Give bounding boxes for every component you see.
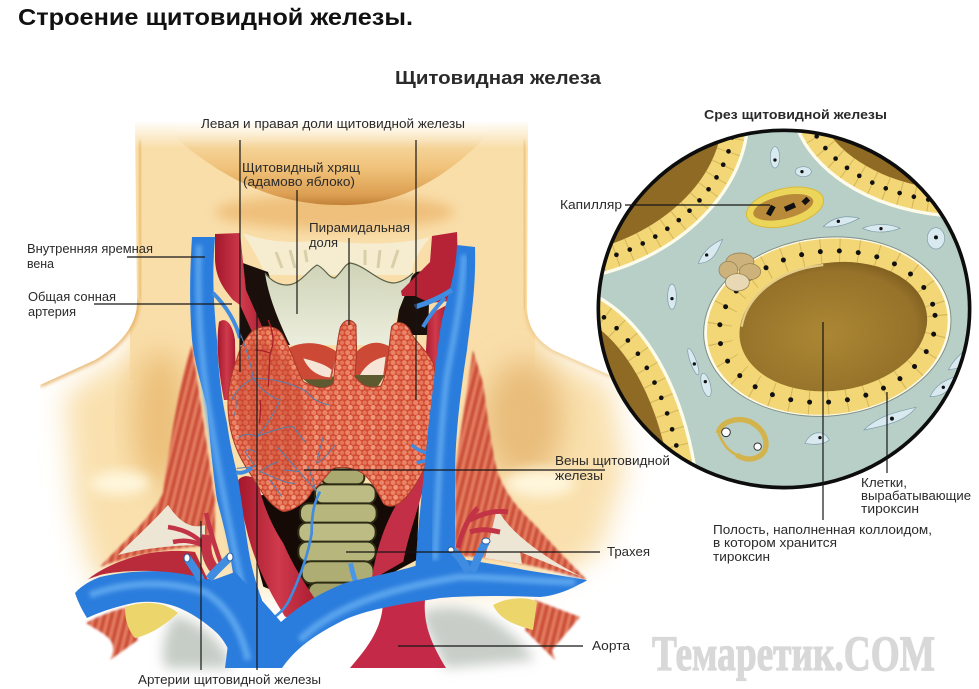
carotid artery: left middle: [218, 320, 236, 400]
label: internal jugular vein: [27, 241, 153, 271]
muscle behind right clavicle: [525, 600, 580, 660]
label: thyroxine-producing cells: вырабатывающие: [861, 488, 971, 503]
carotid artery: right middle: [424, 305, 447, 400]
follicle: central: [703, 236, 952, 417]
follicle: lower left: [600, 296, 696, 464]
thyroid vein on trachea: [275, 492, 320, 617]
label: colloid cavity: тироксин: [713, 549, 770, 564]
jugular branch: left to thyroid: [236, 468, 252, 473]
larynx cartilage: [265, 250, 413, 345]
label: aorta: Аорта: [592, 638, 631, 653]
isthmus shadow: [300, 375, 385, 395]
label: colloid cavity: Полость, наполненная коллоидом,: [713, 522, 932, 537]
label: common carotid artery: Общая сонная: [28, 289, 116, 304]
internal jugular vein: right: [415, 245, 475, 575]
label: thyroxine-producing cells: [861, 475, 971, 516]
fade at top of neck: [125, 120, 540, 148]
label: thyroxine-producing cells: тироксин: [861, 501, 919, 516]
larynx fringe: [243, 233, 430, 275]
label: internal jugular vein: Внутренняя яремная: [27, 241, 153, 256]
label: thyroid cartilage: Щитовидный хрящ: [242, 160, 360, 175]
carotid artery: left lower: [238, 476, 318, 620]
dark cavity left of larynx: [240, 262, 292, 345]
panel: neck anatomy illustration: [40, 122, 640, 674]
label: pyramidal lobe: Пирамидальная: [309, 220, 410, 235]
label: capillary: Капилляр: [560, 197, 622, 212]
heading: illustration title: Щитовидная железа: [395, 67, 602, 88]
trachea rear shadow and rings: [228, 320, 437, 620]
label: colloid cavity: [713, 522, 932, 564]
aorta: [350, 600, 446, 668]
small cross-cut vessel: [718, 420, 766, 459]
skin: neck and shoulders: [40, 120, 625, 600]
label: thyroid cartilage: [242, 160, 360, 189]
lens background: [599, 131, 969, 487]
label: trachea: Трахея: [607, 544, 650, 559]
internal jugular vein: left: [190, 237, 262, 668]
carotid artery: right lower: [372, 463, 429, 580]
jugular branches: upper: [213, 290, 452, 338]
skin: chin shadow: [178, 125, 487, 205]
vein stub on trachea: [351, 563, 359, 590]
side muscle: right: [455, 350, 587, 580]
label: thyroid veins: железы: [555, 468, 603, 483]
panel: thyroid cross-section lens: [596, 128, 972, 490]
isthmus muscles: [288, 343, 391, 379]
clavicle: right: [493, 598, 537, 630]
lens outline: [598, 130, 970, 488]
skin: under-chin tone: [215, 194, 455, 230]
label: common carotid artery: [28, 289, 116, 319]
carotid artery: right upper: [401, 232, 459, 303]
label: thyroid veins: [555, 453, 670, 483]
subclavian and brachiocephalic veins: [75, 558, 587, 668]
capillary: [746, 186, 824, 228]
thyroid veins: thin branching vessels: [232, 320, 335, 497]
label: thyroid cartilage: (адамово яблоко): [243, 174, 355, 189]
heading: cross-section title: Срез щитовидной железы: [704, 107, 887, 122]
vessels near left clavicle: [87, 513, 222, 580]
vessels near right clavicle: [458, 508, 508, 548]
fibrocyte nuclei: [670, 158, 945, 439]
heading: page title: Строение щитовидной железы.: [18, 4, 413, 30]
clavicle: left: [125, 603, 178, 638]
fade of skin toward the bottom: [0, 560, 660, 689]
vein stubs at clavicles: [187, 542, 486, 580]
muscle behind left clavicle: [86, 607, 138, 660]
label: common carotid artery: артерия: [28, 304, 76, 319]
label: thyroid lobes: Левая и правая доли щитовидной железы: [201, 117, 465, 131]
label: pyramidal lobe: [309, 220, 410, 250]
carotid artery: left upper: [215, 233, 268, 345]
colloid cluster: [719, 253, 761, 291]
label: colloid cavity: в котором хранится: [713, 535, 837, 550]
thyroid gland with lobules: [228, 320, 436, 512]
subclavian highlights: [90, 577, 575, 660]
side muscle: left: [100, 345, 215, 567]
thyroid artery: thin red branches: [255, 320, 273, 423]
label: thyroxine-producing cells: Клетки,: [861, 475, 907, 490]
pale tendons near clavicle: [118, 505, 582, 577]
lungs: grey tissue: [163, 607, 535, 668]
follicle: upper right: [797, 132, 941, 217]
label: pyramidal lobe: доля: [309, 235, 338, 250]
fibrocytes: connective tissue cells: [668, 147, 965, 444]
leader lines: [94, 140, 887, 670]
dark cavity right of larynx: [395, 270, 430, 335]
label: internal jugular vein: вена: [27, 256, 55, 271]
label: thyroid veins: Вены щитовидной: [555, 453, 670, 468]
follicle: upper left: [604, 136, 748, 275]
internal jugular highlight: right: [435, 255, 464, 560]
internal jugular highlight: left: [198, 245, 243, 590]
label: thyroid arteries: Артерии щитовидной железы: [138, 672, 321, 687]
thyroid vein stub: right: [412, 445, 437, 463]
vein stub openings: [184, 538, 490, 562]
